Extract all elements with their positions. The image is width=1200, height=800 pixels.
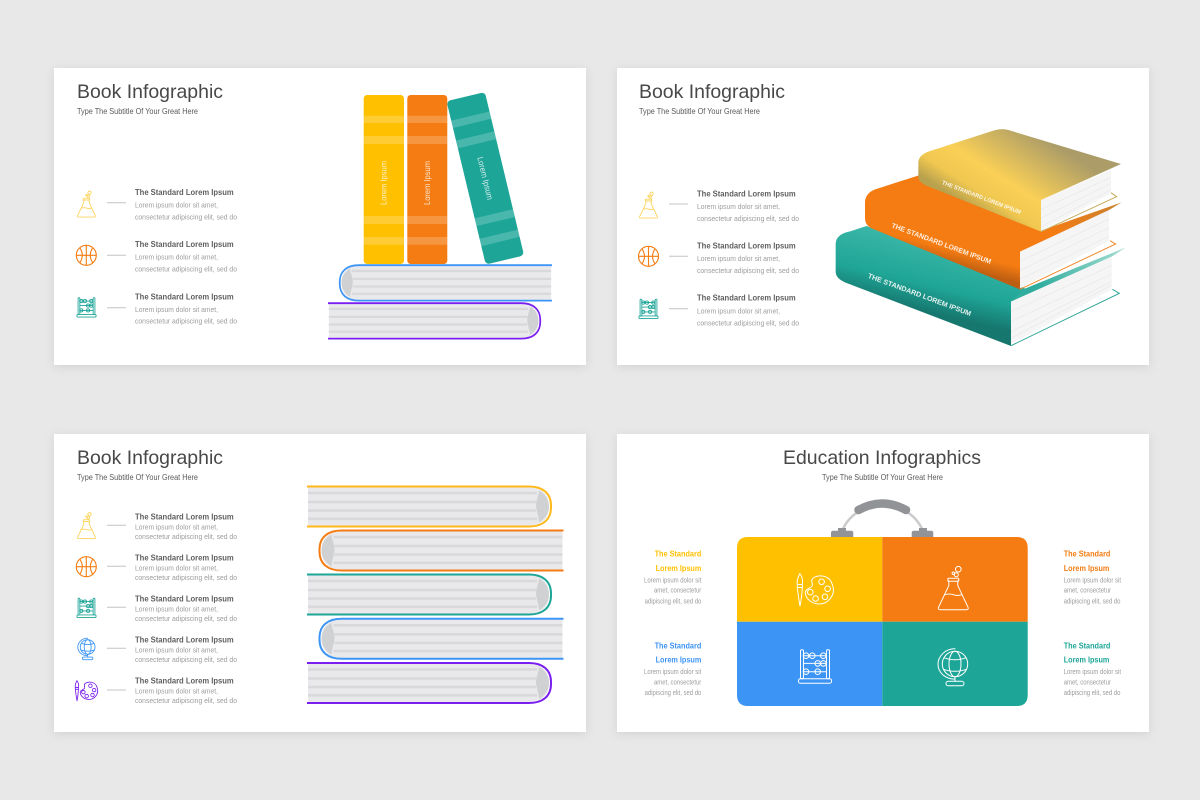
subtitle: Type The Subtitle Of Your Great Here bbox=[77, 107, 198, 116]
callout: orange: adipiscing elit, sed do bbox=[1064, 596, 1120, 605]
icon: abacus bbox=[77, 598, 96, 618]
list item 2: The Standard Lorem Ipsum bbox=[135, 239, 234, 249]
panel: education briefcase bbox=[617, 434, 1149, 732]
list item 3: Lorem ipsum dolor sit amet, bbox=[697, 306, 780, 316]
list item 5: consectetur adipiscing elit, sed do bbox=[135, 696, 237, 705]
icon: palette and brush bbox=[797, 574, 833, 606]
list item 2: The Standard Lorem Ipsum bbox=[135, 552, 234, 562]
list item 4: consectetur adipiscing elit, sed do bbox=[135, 655, 237, 664]
book: orange middle bbox=[865, 175, 1122, 289]
divider item 2 bbox=[669, 255, 688, 257]
heading: Book Infographic bbox=[639, 81, 785, 103]
list item 2: Lorem ipsum dolor sit amet, bbox=[697, 254, 780, 263]
book: yellow upright: Lorem Ipsum bbox=[378, 161, 388, 205]
list item 3: Lorem ipsum dolor sit amet, bbox=[135, 604, 218, 614]
divider item 5 bbox=[107, 689, 126, 691]
callout: orange: The Standard bbox=[1064, 549, 1110, 559]
book: blue lying bbox=[340, 265, 552, 301]
book: yellow top bbox=[918, 129, 1121, 232]
heading: Book Infographic bbox=[77, 81, 223, 103]
list item 3: consectetur adipiscing elit, sed do bbox=[135, 614, 237, 623]
list item 3 bbox=[135, 594, 237, 623]
book: orange upright bbox=[407, 95, 447, 264]
book: orange upright: Lorem Ipsum bbox=[422, 161, 432, 205]
panel: 3D book stack bbox=[617, 68, 1149, 365]
list item 1: Lorem ipsum dolor sit amet, bbox=[135, 201, 218, 210]
icon: flask bbox=[938, 566, 968, 610]
panel: five-book stack bbox=[54, 434, 586, 732]
icon: globe bbox=[938, 649, 968, 686]
list item 1: Lorem ipsum dolor sit amet, bbox=[697, 202, 780, 211]
list item 1: Lorem ipsum dolor sit amet, bbox=[135, 522, 218, 532]
divider item 3 bbox=[669, 308, 688, 310]
list item 3 bbox=[135, 292, 237, 326]
list item 2: Lorem ipsum dolor sit amet, bbox=[135, 564, 218, 572]
callout: yellow: Lorem Ipsum bbox=[656, 563, 702, 573]
icon: flask bbox=[78, 191, 96, 217]
callout: yellow: The Standard bbox=[655, 549, 701, 559]
list item 1: The Standard Lorem Ipsum bbox=[135, 187, 234, 197]
callout: orange: Lorem ipsum dolor sit bbox=[1064, 575, 1121, 584]
icon: abacus bbox=[798, 650, 832, 683]
list item 5: The Standard Lorem Ipsum bbox=[135, 676, 234, 686]
book: purple lying bbox=[328, 303, 540, 339]
panel background bbox=[617, 434, 1149, 732]
book: orange middle: THE STANDARD LOREM IPSUM bbox=[890, 223, 992, 266]
panel background bbox=[54, 434, 586, 732]
icon: flask bbox=[78, 513, 96, 539]
briefcase handle bbox=[831, 504, 933, 537]
callout: blue: amet, consectetur bbox=[654, 677, 702, 686]
panel background bbox=[617, 68, 1149, 365]
icon: globe bbox=[78, 638, 95, 660]
book: purple bbox=[307, 663, 551, 703]
callout: yellow: adipiscing elit, sed do bbox=[645, 596, 701, 605]
list item 3: consectetur adipiscing elit, sed do bbox=[697, 318, 799, 328]
list item 4: Lorem ipsum dolor sit amet, bbox=[135, 646, 218, 654]
callout: yellow bbox=[644, 549, 702, 605]
callout: teal: adipiscing elit, sed do bbox=[1064, 688, 1120, 697]
divider item 2 bbox=[107, 254, 126, 256]
book: teal leaning bbox=[447, 92, 524, 265]
list item 2 bbox=[135, 552, 237, 582]
list item 3: The Standard Lorem Ipsum bbox=[135, 292, 234, 302]
callout: orange bbox=[1064, 549, 1121, 605]
book: orange bbox=[320, 530, 564, 570]
list item 4: The Standard Lorem Ipsum bbox=[135, 634, 234, 644]
callout: blue: The Standard bbox=[655, 640, 701, 650]
book: blue bbox=[320, 619, 564, 659]
callout: blue: Lorem ipsum dolor sit bbox=[644, 667, 701, 676]
list item 3: Lorem ipsum dolor sit amet, bbox=[135, 305, 218, 314]
heading: Education Infographics bbox=[783, 447, 981, 469]
subtitle: Type The Subtitle Of Your Great Here bbox=[822, 473, 943, 482]
divider item 1 bbox=[107, 202, 126, 204]
list item 2: consectetur adipiscing elit, sed do bbox=[697, 266, 799, 275]
callout: yellow: amet, consectetur bbox=[654, 586, 702, 595]
list item 1 bbox=[135, 512, 237, 541]
icon: palette and brush bbox=[75, 681, 98, 701]
list item 4 bbox=[135, 634, 237, 664]
list item 2: consectetur adipiscing elit, sed do bbox=[135, 264, 237, 273]
list item 2: The Standard Lorem Ipsum bbox=[697, 240, 796, 250]
callout: orange: amet, consectetur bbox=[1064, 586, 1111, 595]
divider item 4 bbox=[107, 647, 126, 649]
callout: teal: amet, consectetur bbox=[1064, 677, 1111, 686]
list item 3: The Standard Lorem Ipsum bbox=[135, 594, 234, 604]
icon: basketball bbox=[76, 557, 96, 577]
book: teal bottom: THE STANDARD LOREM IPSUM bbox=[867, 273, 972, 318]
divider item 1 bbox=[107, 524, 126, 526]
list item 5: Lorem ipsum dolor sit amet, bbox=[135, 686, 218, 696]
callout: teal: Lorem ipsum dolor sit bbox=[1064, 667, 1121, 676]
heading: Book Infographic bbox=[77, 447, 223, 469]
book: teal leaning: Lorem Ipsum bbox=[475, 156, 495, 201]
list item 3 bbox=[697, 293, 799, 328]
icon: flask bbox=[640, 192, 658, 218]
book: teal bottom bbox=[836, 226, 1126, 346]
icon: abacus bbox=[77, 298, 96, 317]
list item 1: The Standard Lorem Ipsum bbox=[135, 512, 234, 522]
list item 2: consectetur adipiscing elit, sed do bbox=[135, 573, 237, 582]
book: yellow upright bbox=[364, 95, 404, 264]
divider item 3 bbox=[107, 606, 126, 608]
callout: blue: Lorem Ipsum bbox=[656, 655, 702, 665]
icon: basketball bbox=[76, 245, 96, 265]
divider item 2 bbox=[107, 565, 126, 567]
briefcase quadrant: yellow palette bbox=[737, 537, 882, 622]
list item 1: consectetur adipiscing elit, sed do bbox=[697, 214, 799, 223]
book: yellow bbox=[307, 486, 551, 526]
callout: orange: Lorem Ipsum bbox=[1064, 563, 1110, 573]
panel background bbox=[54, 68, 586, 365]
callout: blue bbox=[644, 640, 702, 697]
callout: yellow: Lorem ipsum dolor sit bbox=[644, 575, 701, 584]
callout: teal bbox=[1064, 640, 1121, 697]
subtitle: Type The Subtitle Of Your Great Here bbox=[77, 473, 198, 482]
icon: abacus bbox=[639, 299, 658, 319]
briefcase quadrant: teal globe bbox=[882, 622, 1028, 706]
list item 5 bbox=[135, 676, 237, 705]
icon: basketball bbox=[638, 246, 658, 266]
callout: blue: adipiscing elit, sed do bbox=[645, 688, 701, 697]
list item 3: The Standard Lorem Ipsum bbox=[697, 293, 796, 303]
panel: upright books on a stack bbox=[54, 68, 586, 365]
list item 2 bbox=[135, 239, 237, 273]
list item 3: consectetur adipiscing elit, sed do bbox=[135, 317, 237, 326]
list item 1: consectetur adipiscing elit, sed do bbox=[135, 212, 237, 221]
briefcase quadrant: blue abacus bbox=[737, 622, 882, 706]
subtitle: Type The Subtitle Of Your Great Here bbox=[639, 107, 760, 116]
list item 1: consectetur adipiscing elit, sed do bbox=[135, 532, 237, 541]
list item 1: The Standard Lorem Ipsum bbox=[697, 188, 796, 198]
divider item 3 bbox=[107, 307, 126, 309]
list item 1 bbox=[697, 188, 799, 223]
book: teal bbox=[307, 574, 551, 614]
callout: teal: Lorem Ipsum bbox=[1064, 655, 1110, 665]
list item 1 bbox=[135, 187, 237, 221]
list item 2: Lorem ipsum dolor sit amet, bbox=[135, 252, 218, 261]
list item 2 bbox=[697, 240, 799, 275]
illustration: stack of three 3D books bbox=[836, 129, 1126, 346]
book: yellow top: THE STANDARD LOREM IPSUM bbox=[941, 180, 1022, 216]
callout: teal: The Standard bbox=[1064, 640, 1110, 650]
briefcase quadrant: orange flask bbox=[882, 537, 1028, 622]
divider item 1 bbox=[669, 203, 688, 205]
